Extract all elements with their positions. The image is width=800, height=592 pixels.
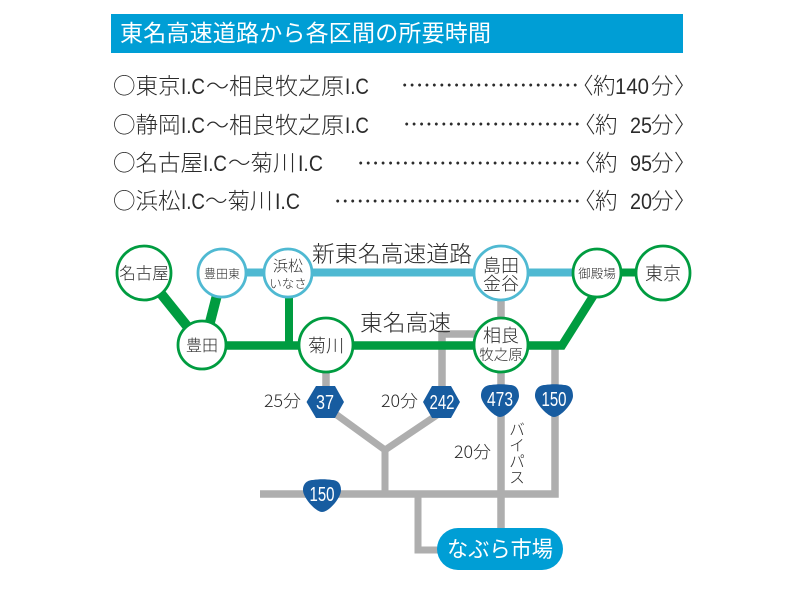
row: Tokyo to Sagara-Makinohara: ························ [400,72,580,96]
node: Nagoya: 名古屋 [119,260,169,284]
row: Hamamatsu to Kikugawa: ○浜松 [113,184,181,216]
node: Nagoya [117,246,171,300]
row: Tokyo to Sagara-Makinohara [113,67,697,101]
row: Nagoya to Kikugawa: 〉 [674,146,697,178]
node: Tokyo: 東京 [645,260,681,286]
row: Nagoya to Kikugawa: I.C [298,151,323,176]
route marker 150 lower: 150 [310,484,334,506]
grey local roads [260,290,555,550]
row: Tokyo to Sagara-Makinohara: I.C [345,74,369,99]
node: Sagara Makinohara: 牧之原 [479,344,523,365]
node: Sagara Makinohara [474,318,528,372]
route marker 473 [481,384,519,417]
travel time list [113,67,697,216]
node: Hamamatsu Inasa: 浜松 [273,255,303,276]
row: Hamamatsu to Kikugawa: I.C [275,189,300,214]
row: Hamamatsu to Kikugawa: 20 [630,189,652,214]
node: Hamamatsu Inasa: いなさ [269,273,307,292]
row: Shizuoka to Sagara-Makinohara: 〉 [674,108,697,140]
node: Sagara Makinohara: 相良 [483,322,519,348]
row: Hamamatsu to Kikugawa: 分 [651,184,674,216]
green expressway lines [150,272,640,346]
node: Gotemba [573,249,621,297]
time label 20 min bypass: 20分 [454,438,491,463]
destination: Nabura Ichiba: なぶら市場 [447,532,553,564]
row: Hamamatsu to Kikugawa [113,184,697,216]
row: Shizuoka to Sagara-Makinohara [113,106,697,140]
row: Shizuoka to Sagara-Makinohara: I.C [345,113,369,138]
label: bypass: バイパス [505,421,529,485]
destination: Nabura Ichiba [437,528,563,570]
label: Tomei: 東名高速 [360,306,451,338]
route marker 242 [423,386,460,418]
route marker 37 [306,386,344,418]
row: Nagoya to Kikugawa: I.C [203,151,227,176]
row: Hamamatsu to Kikugawa: ································· [333,188,582,212]
node: Toyotahigashi: 豊田東 [204,265,240,282]
row: Shizuoka to Sagara-Makinohara: 〈 [573,108,596,140]
node: Gotemba: 御殿場 [578,263,616,282]
node: Kikugawa [299,318,353,372]
row: Nagoya to Kikugawa: ○名古屋 [113,146,203,178]
row: Tokyo to Sagara-Makinohara: ～相良牧之原 [206,67,344,101]
row: Shizuoka to Sagara-Makinohara: 分 [651,108,674,140]
node: Toyota [178,321,226,369]
light blue expressway line [222,268,597,276]
node: Shimada Kanaya [474,246,528,300]
row: Shizuoka to Sagara-Makinohara: ○静岡 [113,108,181,140]
row: Tokyo to Sagara-Makinohara: 〈 [571,69,594,101]
route marker 473: 473 [487,389,513,411]
row: Nagoya to Kikugawa: 〈 [573,146,596,178]
node: Toyota: 豊田 [186,332,218,356]
row: Nagoya to Kikugawa: ······························ [356,150,582,174]
row: Tokyo to Sagara-Makinohara: ○東京 [113,69,181,101]
row: Nagoya to Kikugawa: 95 [630,151,652,176]
row: Nagoya to Kikugawa: 約 [595,146,618,178]
route map [117,237,690,570]
node: Shimada Kanaya: 島田 [483,252,519,278]
row: Shizuoka to Sagara-Makinohara: ～相良牧之原 [206,106,344,140]
route marker 150 lower [303,479,341,512]
node: Toyotahigashi [198,249,246,297]
row: Shizuoka to Sagara-Makinohara: I.C [181,113,205,138]
row: Tokyo to Sagara-Makinohara: 〉 [674,69,697,101]
row: Nagoya to Kikugawa: 分 [651,146,674,178]
row: Tokyo to Sagara-Makinohara: I.C [181,74,205,99]
row: Hamamatsu to Kikugawa: ～菊川 [205,184,273,216]
title banner [111,14,683,53]
row: Tokyo to Sagara-Makinohara: 140 [615,74,649,99]
time label 20 min route 242: 20分 [381,387,418,412]
title banner: 東名高速道路から各区間の所要時間 [120,14,491,48]
row: Hamamatsu to Kikugawa: 〉 [674,184,697,216]
route marker 242: 242 [430,392,454,414]
route marker 150 upper [535,384,573,417]
time label 25 min: 25分 [264,387,301,412]
row: Hamamatsu to Kikugawa: 〈 [573,184,596,216]
row: Shizuoka to Sagara-Makinohara: 約 [595,108,618,140]
row: Tokyo to Sagara-Makinohara: 分 [651,69,674,101]
route marker 37: 37 [316,392,334,414]
row: Nagoya to Kikugawa [113,146,697,178]
row: Tokyo to Sagara-Makinohara: 約 [593,69,616,101]
route marker 150 upper: 150 [542,389,566,411]
row: Hamamatsu to Kikugawa: 約 [595,184,618,216]
row: Shizuoka to Sagara-Makinohara: 25 [630,113,652,138]
node: Hamamatsu Inasa [264,249,312,297]
row: Shizuoka to Sagara-Makinohara: ························ [402,111,582,135]
node: Shimada Kanaya: 金谷 [483,270,519,296]
row: Nagoya to Kikugawa: ～菊川 [228,146,296,178]
label: Shin-Tomei: 新東名高速道路 [312,237,472,269]
row: Hamamatsu to Kikugawa: I.C [181,189,205,214]
node: Tokyo [636,246,690,300]
node: Kikugawa: 菊川 [308,332,344,358]
